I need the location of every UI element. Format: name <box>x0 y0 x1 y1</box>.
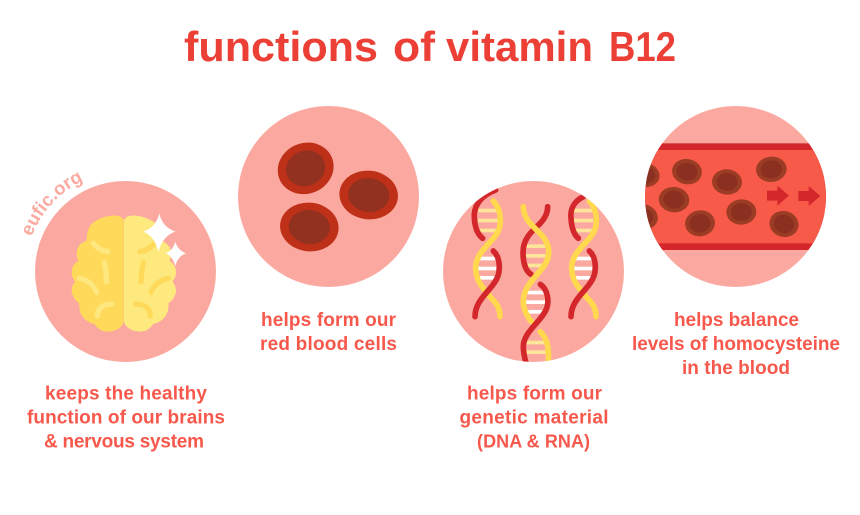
caption: brain: function of our brains <box>27 408 225 428</box>
icon: three red blood cells <box>270 134 400 254</box>
panel: DNA <box>443 181 624 452</box>
icon: blood vessel with cells and arrows <box>645 143 826 250</box>
caption: red blood cells: red blood cells <box>260 334 397 355</box>
panel: brain <box>27 181 225 452</box>
caption: blood vessel: in the blood <box>682 358 790 379</box>
caption: brain: keeps the healthy <box>45 384 207 404</box>
watermark: eufic.org: eufic.org <box>24 172 83 235</box>
icon: DNA strands <box>474 190 596 362</box>
caption: red blood cells: helps form our <box>261 310 397 331</box>
title: of <box>393 23 436 70</box>
circle: brain background <box>35 181 216 362</box>
caption: DNA: helps form our <box>467 384 603 404</box>
panel: blood vessel <box>625 106 840 379</box>
caption: blood vessel: levels of homocysteine <box>632 334 840 355</box>
caption: red blood cells <box>260 310 397 355</box>
caption: DNA <box>460 384 608 452</box>
caption: DNA: (DNA & RNA) <box>477 432 590 452</box>
caption: DNA: genetic material <box>460 408 608 428</box>
circle: vessel background <box>645 106 826 287</box>
title: vitamin <box>446 23 593 70</box>
circle: DNA background <box>443 181 624 362</box>
caption: blood vessel <box>632 310 840 379</box>
caption: brain: & nervous system <box>44 432 204 452</box>
caption: blood vessel: helps balance <box>674 310 799 331</box>
circle: red blood cells background <box>238 106 419 287</box>
panel: red blood cells <box>238 106 419 355</box>
title: B12 <box>609 23 676 70</box>
title <box>184 23 676 70</box>
caption: brain <box>27 384 225 452</box>
title: functions <box>184 23 378 70</box>
icon: brain with sparkles <box>72 213 186 332</box>
